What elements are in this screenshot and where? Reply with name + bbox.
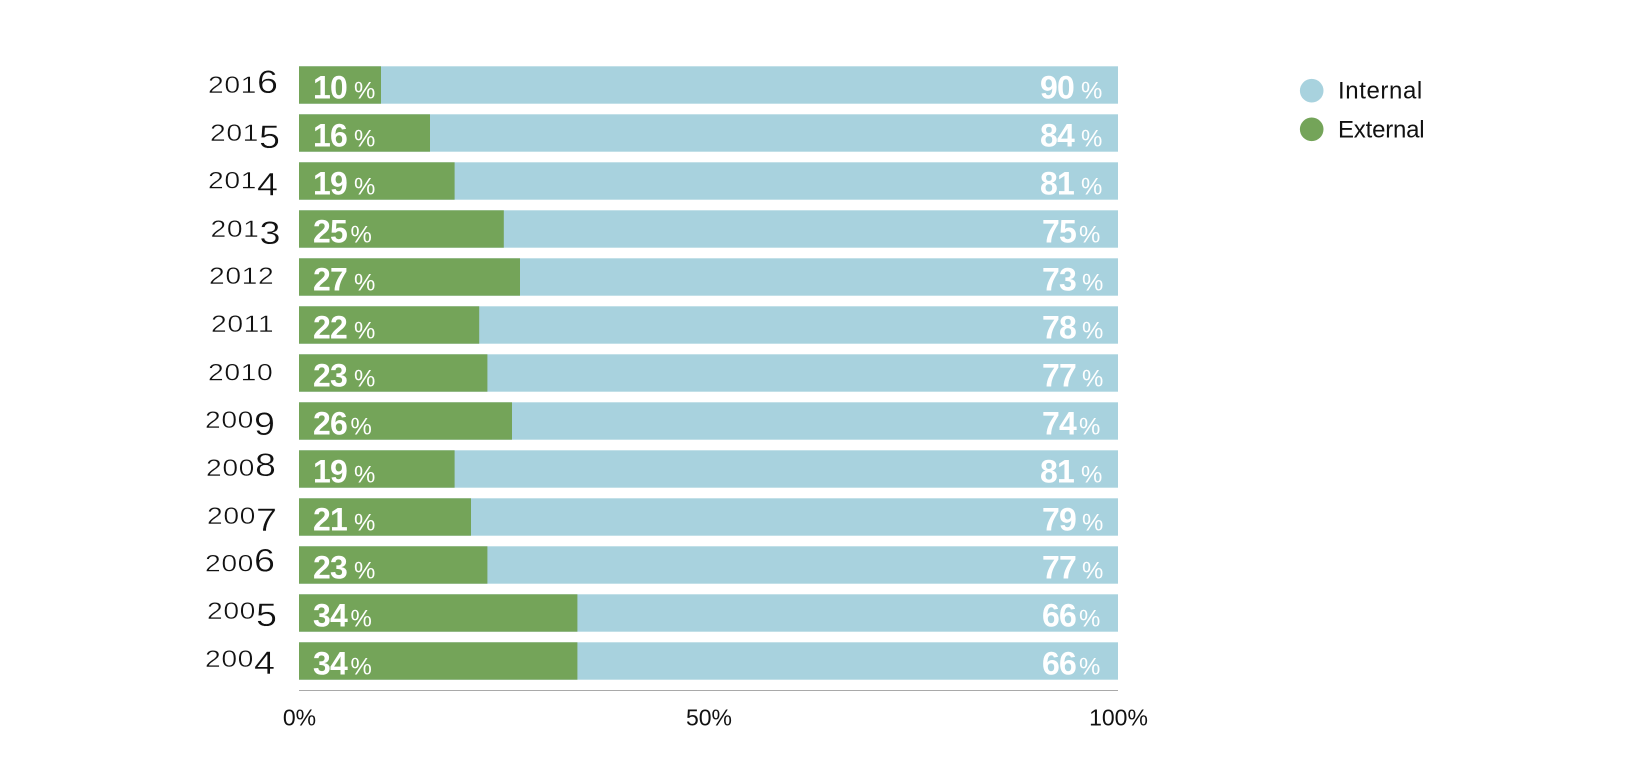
internal bar 2007 (299, 498, 1118, 536)
row 2011 (211, 306, 1118, 345)
external bar 2005 (299, 594, 577, 632)
x axis (283, 690, 1148, 731)
internal value 2011: 78% (1042, 309, 1103, 345)
year label 2004: 200 (205, 645, 254, 672)
external value 2005: 34% (313, 597, 372, 633)
internal value 2006: 77% (1042, 549, 1103, 585)
internal value 2012: 73% (1042, 261, 1103, 297)
external value 2007: 21 % (313, 501, 375, 537)
row 2007 (207, 498, 1118, 538)
year label 2005: 5 (256, 598, 277, 633)
external value 2014: 19 % (313, 165, 375, 201)
year label 2009: 9 (254, 407, 275, 442)
external value 2011: 22 % (313, 309, 375, 345)
row 2010 (208, 354, 1118, 393)
internal value 2015: 84 % (1040, 117, 1102, 153)
external bar 2013 (299, 210, 504, 248)
legend (1300, 77, 1424, 143)
axis label 50%: 50% (686, 705, 732, 731)
external bar 2012 (299, 258, 520, 296)
year label 2010: 2010 (208, 359, 273, 386)
internal value 2009: 74% (1042, 405, 1100, 441)
external bar 2010 (299, 354, 487, 392)
internal bar 2015 (299, 114, 1118, 152)
year label 2009: 200 (205, 406, 254, 433)
year label 2004: 4 (254, 646, 275, 681)
internal bar 2005 (299, 594, 1118, 632)
internal value 2014: 81 % (1040, 165, 1102, 201)
internal bar 2013 (299, 210, 1118, 248)
year label 2013: 201 (210, 215, 260, 242)
internal value 2004: 66% (1042, 645, 1100, 681)
internal bar 2010 (299, 354, 1118, 392)
external bar 2016 (299, 66, 381, 104)
external bar 2014 (299, 162, 455, 200)
internal bar 2016 (299, 66, 1118, 104)
external value 2012: 27 % (313, 261, 375, 297)
internal value 2010: 77% (1042, 357, 1103, 393)
internal value 2013: 75% (1042, 213, 1100, 249)
external value 2009: 26% (313, 405, 372, 441)
year label 2006: 2006 (205, 543, 275, 579)
external value 2016: 10 % (313, 69, 375, 105)
external bar 2008 (299, 450, 455, 488)
internal value 2007: 79% (1042, 501, 1103, 537)
row 2015 (210, 114, 1118, 155)
external bar 2015 (299, 114, 430, 152)
year label 2012: 2012 (209, 262, 274, 289)
external bar 2009 (299, 402, 512, 440)
year label 2013: 3 (260, 216, 281, 251)
row 2004 (205, 642, 1118, 681)
year label 2005: 200 (207, 597, 256, 624)
internal bar 2009 (299, 402, 1118, 440)
external value 2004: 34% (313, 645, 372, 681)
external value 2006: 23 % (313, 549, 375, 585)
internal bar 2006 (299, 546, 1118, 584)
year label 2014: 201 (208, 167, 257, 194)
internal value 2005: 66% (1042, 597, 1100, 633)
external value 2015: 16 % (313, 117, 375, 153)
internal bar 2008 (299, 450, 1118, 488)
row 2006 (205, 543, 1118, 585)
row 2014 (208, 162, 1118, 203)
row 2008 (206, 448, 1118, 489)
year label 2011: 2011 (211, 310, 274, 337)
internal bar 2014 (299, 162, 1118, 200)
internal bar 2012 (299, 258, 1118, 296)
legend item internal: Internal (1338, 77, 1423, 104)
year label 2007: 200 (207, 502, 256, 529)
year label 2008: 2008 (206, 448, 276, 483)
row 2009 (205, 402, 1118, 442)
external value 2010: 23 % (313, 357, 375, 393)
row 2013 (210, 210, 1118, 251)
internal bar 2011 (299, 306, 1118, 344)
legend item external: External (1338, 116, 1424, 143)
external value 2008: 19 % (313, 453, 375, 489)
axis label 0%: 0% (283, 705, 316, 731)
row 2005 (207, 594, 1118, 633)
internal value 2016: 90 % (1040, 69, 1102, 105)
row 2016 (208, 65, 1118, 105)
year label 2015: 201 (210, 119, 259, 146)
external bar 2006 (299, 546, 487, 584)
year label 2007: 7 (256, 503, 277, 538)
external value 2013: 25% (313, 213, 372, 249)
external bar 2011 (299, 306, 479, 344)
internal value 2008: 81 % (1040, 453, 1102, 489)
year label 2014: 4 (257, 167, 278, 203)
axis label 100%: 100% (1089, 705, 1148, 731)
year label 2016: 2016 (208, 65, 278, 100)
year label 2015: 5 (259, 120, 280, 155)
external bar 2007 (299, 498, 471, 536)
row 2012 (209, 258, 1118, 297)
external bar 2004 (299, 642, 577, 680)
internal bar 2004 (299, 642, 1118, 680)
